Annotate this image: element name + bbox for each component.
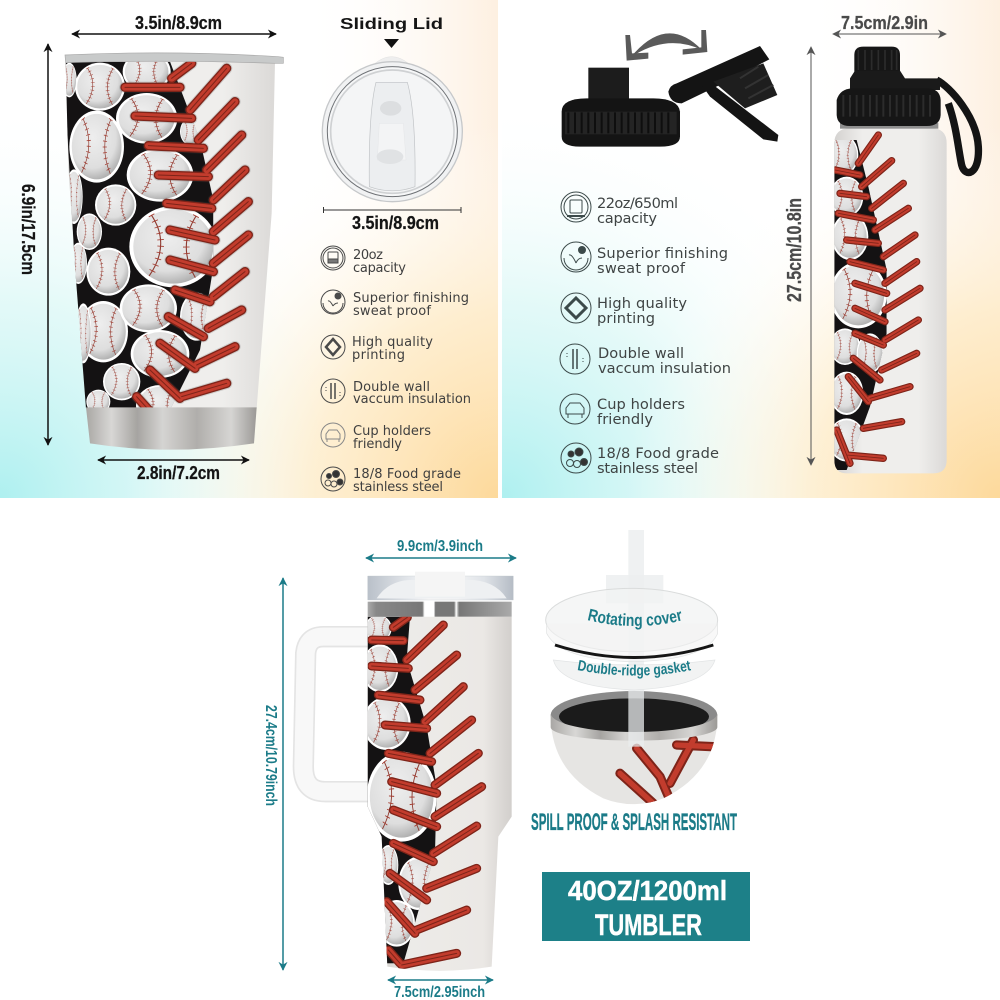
panel: water bottle background xyxy=(502,0,1000,498)
tumbler lid xyxy=(368,572,513,600)
feature list: left column: 20oz xyxy=(353,248,383,263)
bottle body xyxy=(834,128,947,473)
dimension: bottle width: 7.5cm/2.9in xyxy=(841,13,928,33)
dimension: bottle height: 27.5cm/10.8in xyxy=(784,198,806,302)
water bottle illustration xyxy=(828,47,978,475)
feature list: right column: capacity xyxy=(597,210,657,227)
feature list: left column: Superior finishing xyxy=(353,291,469,306)
40oz tumbler illustration xyxy=(303,572,513,971)
feature list: right column: 22oz/650ml xyxy=(597,195,678,212)
flip cap illustration xyxy=(562,30,778,147)
icon: insulation xyxy=(321,379,345,403)
feature icons: left column xyxy=(321,246,345,491)
feature list: left column: friendly xyxy=(353,437,402,452)
feature list: right column: stainless steel xyxy=(597,460,698,477)
dimension: lid width: 3.5in/8.9cm xyxy=(352,213,439,233)
straw xyxy=(606,530,663,747)
feature list: right column: Double wall xyxy=(598,345,684,362)
20oz tumbler illustration xyxy=(62,52,283,450)
dimension: height: 6.9in/17.5cm xyxy=(18,184,38,275)
feature list: left column: stainless steel xyxy=(353,480,443,495)
badge: capacity: 40OZ/1200ml xyxy=(568,875,727,906)
text: SPILL PROOF & SPLASH RESISTANT xyxy=(531,809,737,836)
icon: capacity xyxy=(321,246,345,270)
dimension: lid width xyxy=(324,207,461,233)
icon: printing xyxy=(321,335,345,359)
callout: gasket: Double-ridge gasket xyxy=(578,660,692,679)
feature list: right column: 18/8 Food grade xyxy=(597,445,719,462)
tumbler handle xyxy=(303,637,370,792)
icon: insulation xyxy=(560,344,590,374)
icon: stainless steel xyxy=(561,443,591,473)
feature icons: right column xyxy=(560,192,591,473)
icon: sweat proof xyxy=(561,242,591,272)
dimension: base width: 2.8in/7.2cm xyxy=(137,463,220,483)
icon: capacity xyxy=(561,192,591,222)
gasket xyxy=(553,660,715,690)
feature list: left column: High quality xyxy=(352,335,433,350)
dimension: 40oz base width xyxy=(388,980,493,1000)
icon: sweat proof xyxy=(321,290,345,314)
panel: 20oz tumbler background xyxy=(0,0,498,498)
feature list: left column: sweat proof xyxy=(353,304,431,319)
steel band xyxy=(368,602,512,617)
feature list: left column: Cup holders xyxy=(353,424,431,439)
feature list: left column: vaccum insulation xyxy=(353,392,471,407)
steel neck xyxy=(840,123,938,129)
tumbler body xyxy=(66,62,275,408)
icon: printing xyxy=(561,293,591,323)
heading: sliding lid: Sliding Lid xyxy=(340,16,443,33)
icon: rotate arrow xyxy=(625,30,707,61)
feature list: right column xyxy=(597,195,731,477)
feature list: left column: Double wall xyxy=(353,380,430,395)
dimension: top width: 3.5in/8.9cm xyxy=(135,13,222,33)
feature list: right column: printing xyxy=(597,310,655,327)
icon: stainless steel xyxy=(321,467,345,491)
feature list: right column: Cup holders xyxy=(597,396,685,413)
icon: cup holder xyxy=(321,423,345,447)
feature list: right column: friendly xyxy=(597,411,653,428)
bottle loop xyxy=(937,80,978,173)
dimension: 40oz height: 27.4cm/10.79inch xyxy=(262,705,279,806)
feature list: right column: sweat proof xyxy=(597,260,686,277)
feature list: left column xyxy=(352,248,471,495)
feature list: left column: printing xyxy=(352,348,405,363)
feature list: left column: capacity xyxy=(353,261,406,276)
red stitches xyxy=(125,63,248,415)
feature list: right column: Superior finishing xyxy=(597,245,728,262)
cap base xyxy=(562,68,680,147)
open lid xyxy=(668,46,778,142)
callout: rotating cover: Rotating cover xyxy=(588,608,682,630)
icon: cup holder xyxy=(560,394,590,424)
cup bowl xyxy=(551,691,717,804)
red stitches xyxy=(372,617,482,965)
feature list: left column: 18/8 Food grade xyxy=(353,467,461,482)
dimension: 40oz top width: 9.9cm/3.9inch xyxy=(397,538,483,555)
red stitches xyxy=(835,135,920,463)
baseball pattern xyxy=(62,52,248,425)
feature list: right column: High quality xyxy=(597,295,687,312)
tumbler lid xyxy=(65,53,283,63)
rotating cover xyxy=(546,588,718,662)
icon: down arrow xyxy=(384,39,399,48)
baseball pattern xyxy=(828,128,920,475)
baseball pattern xyxy=(362,615,482,968)
exploded lid and cup illustration xyxy=(546,530,718,804)
tumbler body xyxy=(368,617,512,971)
bottle cap xyxy=(837,47,941,126)
badge: capacity xyxy=(542,872,750,942)
sliding lid illustration xyxy=(322,57,462,202)
badge: capacity: TUMBLER xyxy=(595,909,702,942)
feature list: right column: vaccum insulation xyxy=(598,360,731,377)
steel base xyxy=(86,407,257,450)
